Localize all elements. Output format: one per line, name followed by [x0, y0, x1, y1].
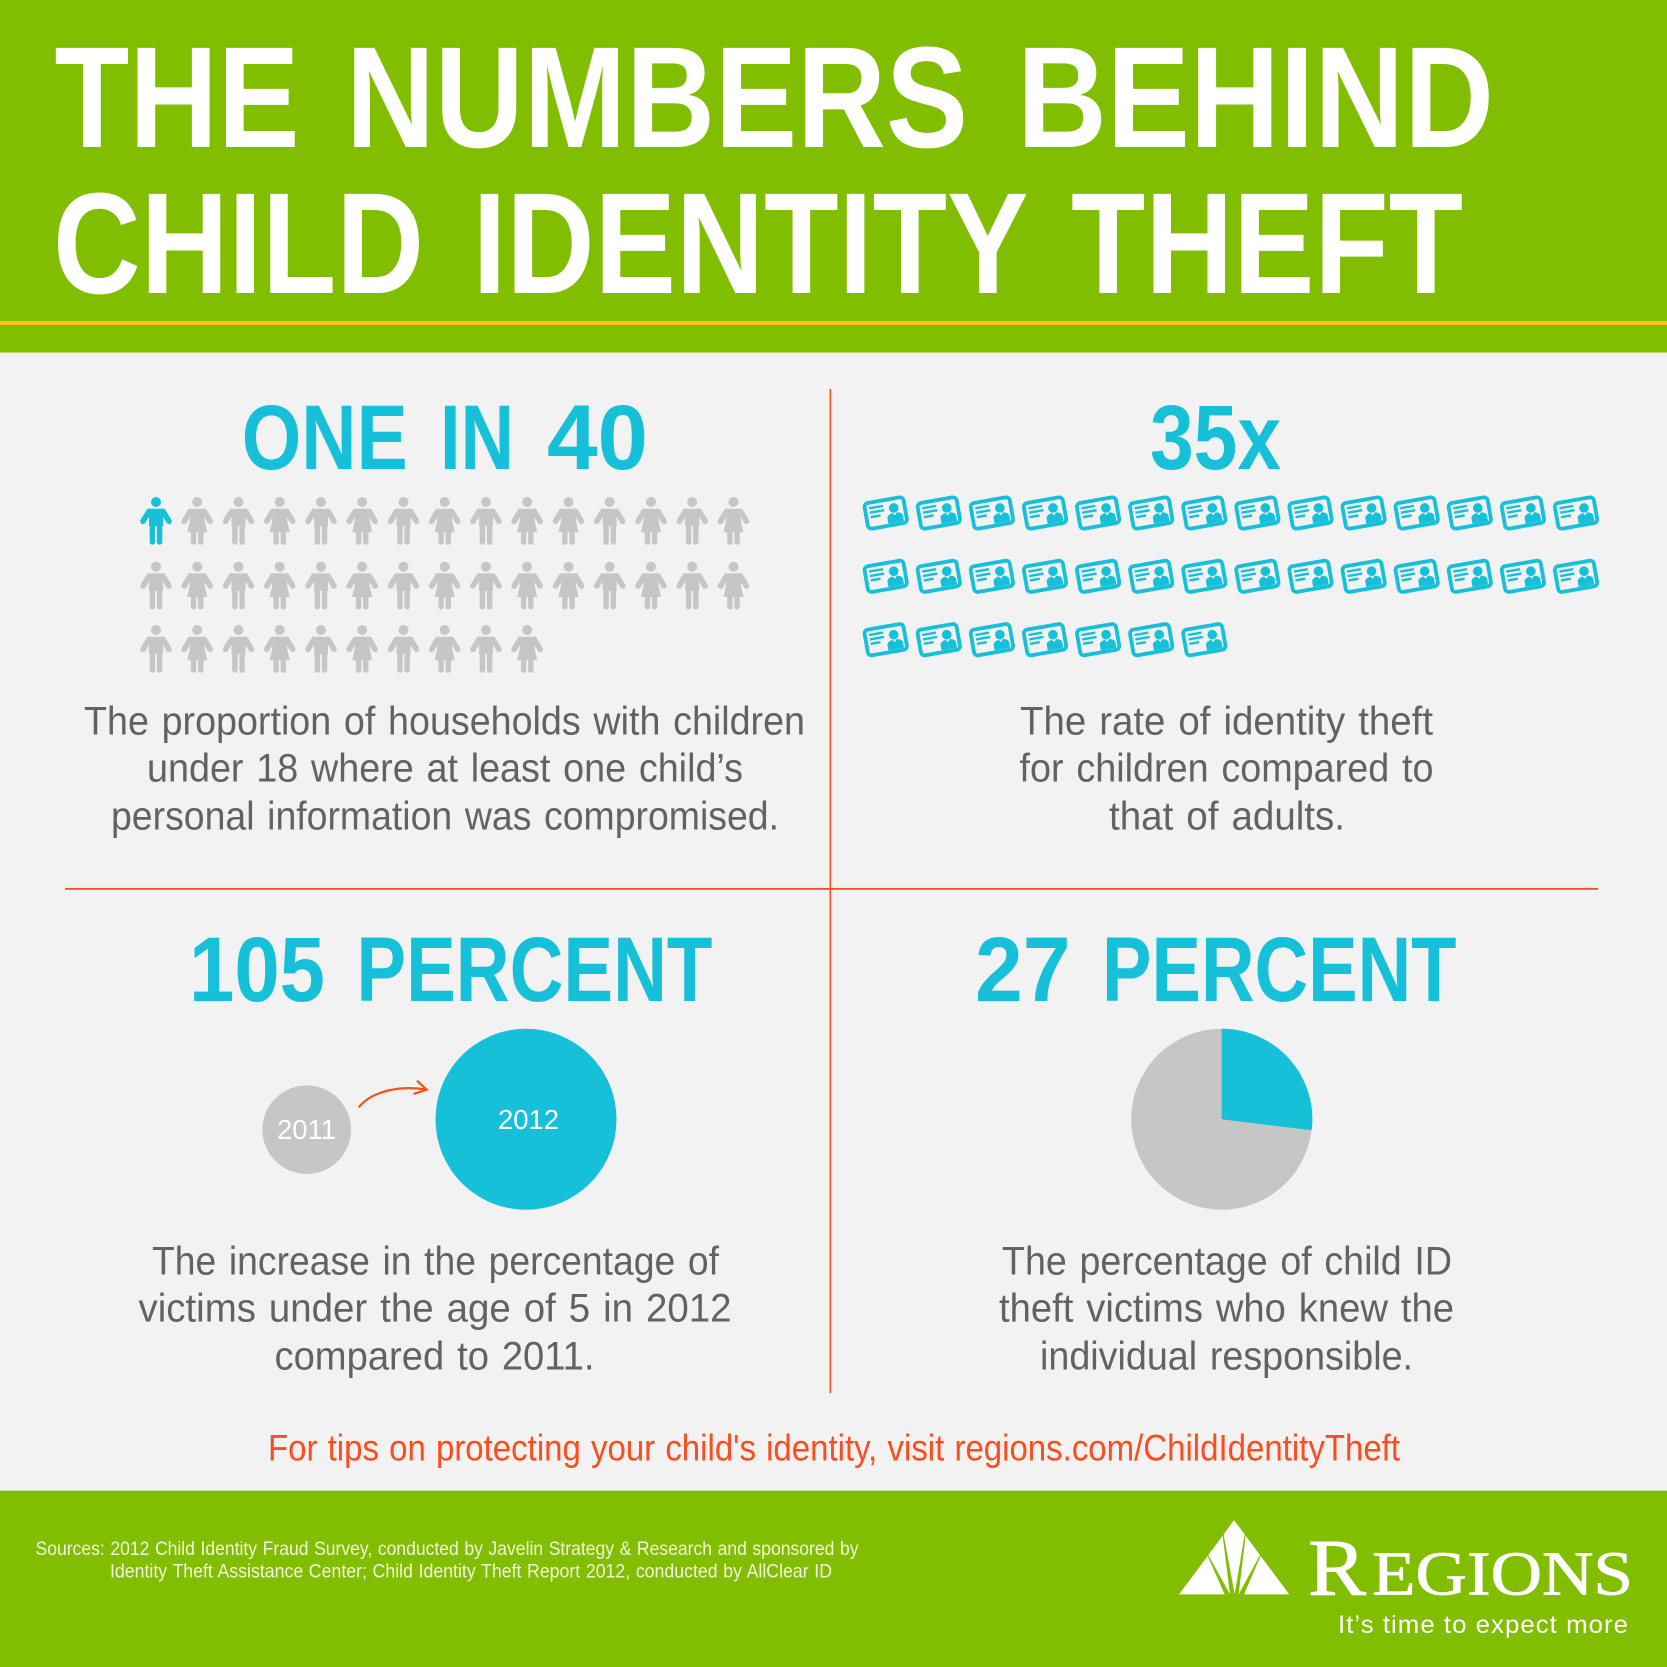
heading: 105 percent: PERCENT: [356, 919, 712, 1021]
description: one in 40: The proportion of households with children: [84, 699, 805, 743]
description: 105 percent: compared to 2011.: [274, 1334, 594, 1378]
pictogram: 35 ID cards: [864, 497, 1598, 656]
circle: 2011: 2011: [277, 1114, 336, 1145]
title: THEFT: [1071, 163, 1463, 324]
circle: 2012: [436, 1029, 616, 1210]
panel: 35x: [864, 387, 1598, 838]
description: 27 percent: individual responsible.: [1040, 1334, 1413, 1378]
heading: 27 percent: 27: [975, 919, 1070, 1021]
heading: 27 percent: PERCENT: [1102, 919, 1456, 1021]
title: IDENTITY: [472, 163, 1028, 324]
heading: one in 40: 40: [547, 387, 648, 489]
description: one in 40: [84, 699, 805, 838]
description: 35x: that of adults.: [1109, 794, 1345, 838]
panel: one in 40: [84, 387, 805, 838]
title: NUMBERS: [346, 17, 968, 178]
tagline: It’s time to expect more: [1338, 1611, 1629, 1639]
header banner: [0, 0, 1667, 352]
title: BEHIND: [1017, 17, 1494, 178]
circle: 2011: [262, 1085, 351, 1174]
description: 35x: The rate of identity theft: [1020, 699, 1433, 743]
circle: 2012: 2012: [498, 1104, 559, 1135]
description: 35x: for children compared to: [1020, 747, 1434, 791]
heading: one in 40: [242, 387, 648, 489]
call to action: For tips on protecting your child's identity, visit regions.com/ChildIdentityTheft: [268, 1428, 1401, 1469]
panel: 27 percent: [975, 919, 1456, 1378]
heading: 105 percent: [189, 919, 712, 1021]
quadrant divider lines: [65, 389, 1598, 1393]
sources: [36, 1538, 859, 1583]
description: 27 percent: [999, 1239, 1454, 1378]
sources: Sources: 2012 Child Identity Fraud Survey, conducted by Javelin Strategy & Research and sponsored by: [36, 1538, 859, 1560]
description: one in 40: under 18 where at least one child’s: [147, 747, 743, 791]
description: 27 percent: The percentage of child ID: [1002, 1239, 1452, 1283]
title: [53, 17, 1494, 324]
icon: Regions pyramid: [1179, 1520, 1289, 1594]
pictogram: 40 children, one highlighted: [143, 497, 746, 670]
description: 105 percent: victims under the age of 5 in 2012: [138, 1287, 732, 1331]
logo: Regions: [1179, 1520, 1633, 1639]
description: 27 percent: theft victims who knew the: [999, 1287, 1454, 1331]
heading: 27 percent: [975, 919, 1456, 1021]
description: 35x: [1020, 699, 1434, 838]
description: 105 percent: The increase in the percentage of: [152, 1239, 720, 1283]
heading: one in 40: ONE: [242, 387, 408, 489]
footer band: [0, 1491, 1667, 1667]
description: 105 percent: [138, 1239, 732, 1378]
heading: one in 40: IN: [440, 387, 514, 489]
wordmark: R: [1308, 1522, 1366, 1612]
arrow: 2011 to 2012: [359, 1081, 427, 1107]
heading: 35x: 35x: [1150, 387, 1281, 489]
description: one in 40: personal information was compromised.: [111, 794, 779, 838]
panel: 105 percent: [138, 919, 732, 1378]
sources: Identity Theft Assistance Center; Child Identity Theft Report 2012, conducted by AllClear ID: [110, 1561, 832, 1583]
title: CHILD: [53, 163, 424, 324]
pie chart: 27 percent: [1131, 1029, 1312, 1210]
title: THE: [54, 17, 300, 178]
heading: 105 percent: 105: [189, 919, 325, 1021]
logo: Regions: EGIONS: [1372, 1540, 1633, 1608]
